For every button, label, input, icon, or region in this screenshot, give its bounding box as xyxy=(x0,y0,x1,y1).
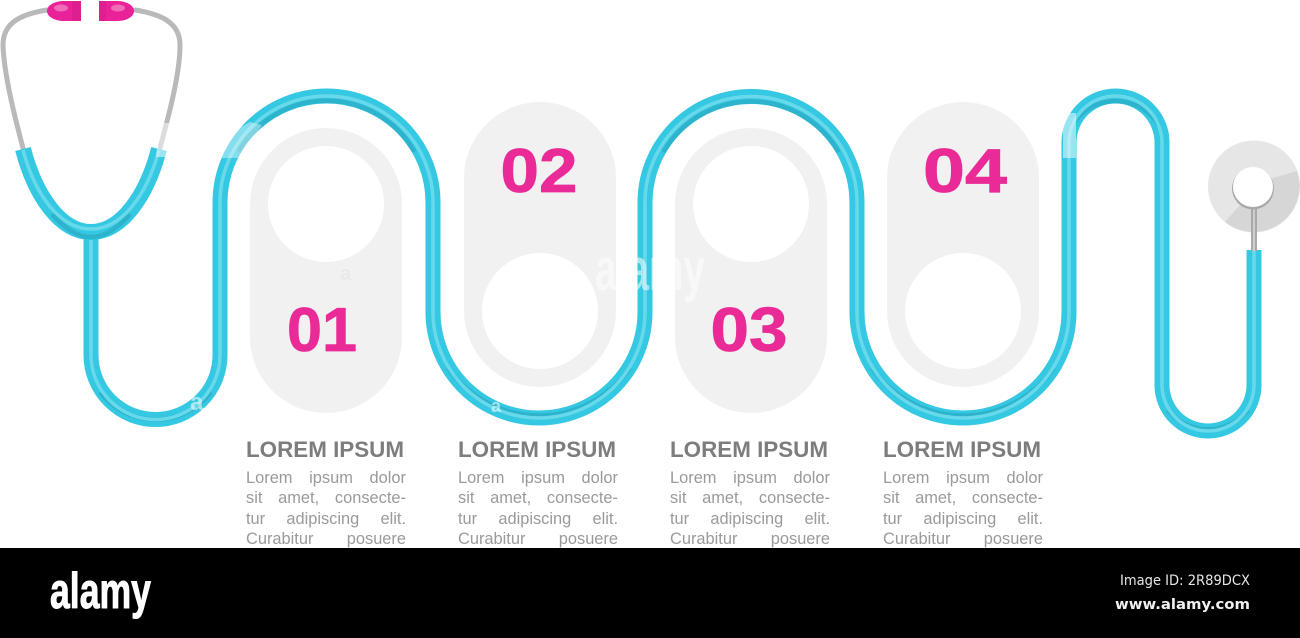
text block 2: sit amet, consecte- xyxy=(458,489,618,507)
text block 1: Lorem ipsum dolor xyxy=(246,469,406,487)
stethoscope Y yoke xyxy=(23,149,159,237)
text block 1: tur adipiscing elit. xyxy=(246,510,406,528)
left ear tip xyxy=(47,1,81,21)
panel 3 pill xyxy=(675,128,827,413)
stethoscope main tube xyxy=(91,96,1254,431)
stethoscope metal ear tubes xyxy=(3,10,180,148)
text block 4: sit amet, consecte- xyxy=(883,489,1043,507)
panel 1 pill xyxy=(250,128,402,413)
text block 4: Lorem ipsum dolor xyxy=(883,469,1043,487)
image id: Image ID: 2R89DCX xyxy=(1120,573,1250,589)
watermark marks: alamy xyxy=(595,236,705,303)
text block 3: Curabitur posuere xyxy=(670,530,830,548)
text block 1: Curabitur posuere xyxy=(246,530,406,548)
number 04: 04 xyxy=(923,137,1008,206)
text block 1: LOREM IPSUM xyxy=(246,437,404,462)
right ear tip xyxy=(99,1,134,21)
text block 2: Lorem ipsum dolor xyxy=(458,469,618,487)
text block 4: tur adipiscing elit. xyxy=(883,510,1043,528)
text block 4: LOREM IPSUM xyxy=(883,437,1041,462)
text block 4 xyxy=(883,437,1043,548)
text block 3: tur adipiscing elit. xyxy=(670,510,830,528)
chest piece xyxy=(1208,140,1300,251)
watermark marks: a xyxy=(491,396,502,416)
text block 2 xyxy=(458,437,618,548)
text block 1: sit amet, consecte- xyxy=(246,489,406,507)
number 03: 03 xyxy=(710,296,788,365)
footer bar xyxy=(0,548,1300,638)
website: www.alamy.com xyxy=(1115,597,1250,613)
text block 2: tur adipiscing elit. xyxy=(458,510,618,528)
text block 1 xyxy=(246,437,406,548)
text block 3: Lorem ipsum dolor xyxy=(670,469,830,487)
watermark marks xyxy=(156,113,1076,416)
watermark marks: a xyxy=(340,263,352,285)
text block 3: LOREM IPSUM xyxy=(670,437,828,462)
panel 2 pill xyxy=(464,102,616,387)
watermark marks: a xyxy=(190,389,204,416)
text block 2: Curabitur posuere xyxy=(458,530,618,548)
text block 3 xyxy=(670,437,830,548)
alamy logo: alamy xyxy=(50,563,151,619)
text block 2: LOREM IPSUM xyxy=(458,437,616,462)
number 02: 02 xyxy=(500,137,578,206)
text block 3: sit amet, consecte- xyxy=(670,489,830,507)
number 01: 01 xyxy=(287,296,357,365)
text block 4: Curabitur posuere xyxy=(883,530,1043,548)
panel 4 pill xyxy=(887,102,1039,387)
